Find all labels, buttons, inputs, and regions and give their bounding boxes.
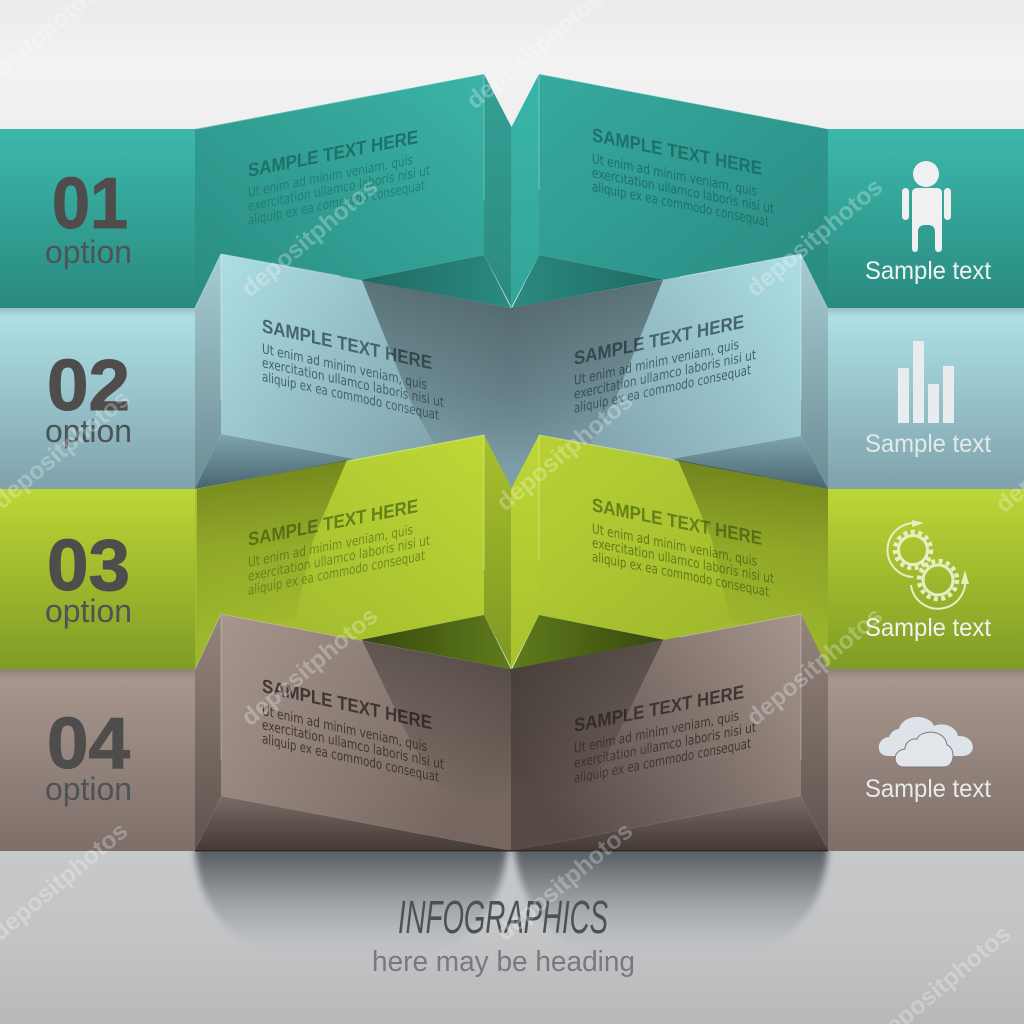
body text: Ut enim ad minim veniam, quis xyxy=(248,522,413,571)
panel 3 right face xyxy=(539,435,828,669)
option 02 label xyxy=(45,346,132,449)
band 3 right strip xyxy=(826,489,1024,669)
arc arrow 1 xyxy=(887,523,916,577)
body text: Ut enim ad minim veniam, quis xyxy=(248,152,413,201)
gear 1 teeth xyxy=(895,532,931,568)
panel 2 right text xyxy=(574,309,756,417)
torso and legs xyxy=(912,188,942,252)
panel 1 left text xyxy=(248,125,431,229)
number 01: 01 xyxy=(52,164,128,244)
body text: aliquip ex ea commodo consequat xyxy=(592,179,769,230)
head xyxy=(913,161,939,187)
band 3 left strip xyxy=(0,489,197,669)
panel 2 right underside xyxy=(665,436,828,489)
subtitle: here may be heading xyxy=(372,946,635,978)
body text: Ut enim ad minim veniam, quis xyxy=(592,521,757,570)
icon: bar chart xyxy=(898,341,954,423)
reflection left lobe xyxy=(195,846,508,963)
panel 3 right cast shadow xyxy=(678,460,828,640)
panel 3 left text xyxy=(248,494,431,599)
base line xyxy=(195,850,828,852)
panel 3 left cast shadow xyxy=(197,460,347,640)
panel 4 right side xyxy=(801,614,828,851)
number 03: 03 xyxy=(47,526,130,606)
caption 3: Sample text xyxy=(865,614,991,642)
band 1 right strip xyxy=(826,129,1024,308)
number 02: 02 xyxy=(47,346,130,426)
body text: aliquip ex ea commodo consequat xyxy=(574,362,751,417)
caption 4: Sample text xyxy=(865,775,991,803)
body text: Ut enim ad minim veniam, quis xyxy=(262,341,427,393)
band 4 left strip xyxy=(0,669,197,851)
icon: gears with arrows xyxy=(887,520,969,609)
source watermarks: depositphotos xyxy=(237,602,383,732)
panel 1 right face xyxy=(539,74,828,308)
band 1 xyxy=(0,129,1024,308)
body text: exercitation ullamco laboris nisi ut xyxy=(574,720,757,772)
panel 2 left cast shadow xyxy=(362,280,511,470)
panel 4 left cast shadow xyxy=(362,640,511,800)
panel 4 right underside xyxy=(511,796,828,851)
option text: option xyxy=(45,593,132,629)
arrowhead 2 xyxy=(961,570,969,584)
panel 3 left underside xyxy=(360,615,511,669)
heading: SAMPLE TEXT HERE xyxy=(592,125,762,180)
panel 4 right face xyxy=(511,614,801,851)
number 04: 04 xyxy=(47,704,130,784)
body text: Ut enim ad minim veniam, quis xyxy=(574,708,739,757)
panel 3: green fold xyxy=(195,435,828,669)
arc arrow 2 xyxy=(911,578,965,609)
panel 3 right text xyxy=(592,495,775,601)
gear 2 ring xyxy=(923,565,953,595)
option 04 label xyxy=(45,704,132,807)
panel 4 left text xyxy=(262,676,444,787)
body text: aliquip ex ea commodo consequat xyxy=(262,369,439,424)
panel 4 right cast shadow xyxy=(511,640,663,800)
panel 2 right side xyxy=(801,254,828,489)
reflection right lobe xyxy=(514,846,828,963)
panel 4 right text xyxy=(574,680,757,787)
panel 1 left underside xyxy=(360,255,511,308)
heading: SAMPLE TEXT HERE xyxy=(248,496,418,551)
title: INFOGRAPHICS xyxy=(398,891,608,943)
heading: SAMPLE TEXT HERE xyxy=(262,676,432,734)
heading: SAMPLE TEXT HERE xyxy=(248,127,418,182)
gear 1 ring xyxy=(898,536,928,564)
body text: aliquip ex ea commodo consequat xyxy=(574,736,751,787)
band 2 xyxy=(0,308,1024,489)
band 2 left strip xyxy=(0,308,197,489)
back cloud xyxy=(879,717,973,756)
panel 4 left face xyxy=(221,614,511,851)
panel 1: teal fold xyxy=(195,74,828,308)
panel 2 left text xyxy=(262,316,444,425)
body text: aliquip ex ea commodo consequat xyxy=(248,548,425,599)
floor reflection xyxy=(195,846,828,963)
arrowhead 1 xyxy=(912,520,924,527)
body text: exercitation ullamco laboris nisi ut xyxy=(574,347,756,403)
caption 1: Sample text xyxy=(865,257,991,285)
panel 2 left face xyxy=(221,254,511,489)
band 1 left strip xyxy=(0,129,197,308)
panel 1 left side xyxy=(484,74,512,308)
icon: person xyxy=(902,161,951,252)
panel 4 left side xyxy=(195,614,221,851)
page background top xyxy=(0,0,1024,130)
left arm xyxy=(902,188,909,220)
panel 1 right text xyxy=(592,125,775,231)
option text: option xyxy=(45,413,132,449)
panel 2 left side xyxy=(195,254,221,489)
panel 4 highlights xyxy=(195,614,801,760)
panel 3 left face xyxy=(195,435,484,669)
page background bottom xyxy=(0,851,1024,1024)
panel 3 right side xyxy=(511,435,539,669)
body text: aliquip ex ea commodo consequat xyxy=(248,178,425,229)
panel 1 highlights xyxy=(197,74,828,200)
panel 1 left face xyxy=(195,74,484,308)
heading: SAMPLE TEXT HERE xyxy=(592,495,762,550)
body text: exercitation ullamco laboris nisi ut xyxy=(248,533,431,585)
body text: aliquip ex ea commodo consequat xyxy=(262,731,439,786)
body text: aliquip ex ea commodo consequat xyxy=(592,549,769,600)
option text: option xyxy=(45,234,132,270)
source watermarks: depositphotos xyxy=(742,173,888,303)
heading: SAMPLE TEXT HERE xyxy=(262,316,432,374)
panel 2 highlights xyxy=(195,254,801,400)
panel 2: light blue fold xyxy=(195,254,828,489)
icon: clouds xyxy=(879,717,973,767)
panel 4: brown fold xyxy=(195,614,828,852)
band 4 right strip xyxy=(826,669,1024,851)
heading: SAMPLE TEXT HERE xyxy=(574,682,744,737)
bar 2 xyxy=(913,341,924,423)
body text: Ut enim ad minim veniam, quis xyxy=(574,337,739,389)
body text: exercitation ullamco laboris nisi ut xyxy=(592,535,775,587)
body text: exercitation ullamco laboris nisi ut xyxy=(248,163,431,215)
front cloud xyxy=(895,732,953,767)
option 01 label xyxy=(45,164,132,270)
body text: exercitation ullamco laboris nisi ut xyxy=(262,355,444,411)
panel 2 left underside xyxy=(195,434,360,489)
bar 3 xyxy=(928,384,939,423)
panel 3 right underside xyxy=(512,615,665,669)
option text: option xyxy=(45,771,132,807)
band 4 xyxy=(0,669,1024,851)
panel 2 right cast shadow xyxy=(511,280,663,470)
body text: exercitation ullamco laboris nisi ut xyxy=(262,717,444,773)
heading: SAMPLE TEXT HERE xyxy=(574,312,744,370)
band 3 xyxy=(0,489,1024,669)
source watermarks: depositphotos xyxy=(237,173,383,303)
panel 2 right face xyxy=(511,254,801,489)
caption 2: Sample text xyxy=(865,430,991,458)
right arm xyxy=(944,188,951,220)
gear 2 teeth xyxy=(919,561,957,599)
body text: Ut enim ad minim veniam, quis xyxy=(592,151,757,200)
band 2 right strip xyxy=(826,308,1024,489)
panel 4 left underside xyxy=(195,796,511,851)
body text: Ut enim ad minim veniam, quis xyxy=(262,703,427,755)
source watermarks: depositphotos xyxy=(492,387,638,517)
body text: exercitation ullamco laboris nisi ut xyxy=(592,165,775,217)
source watermarks: depositphotos xyxy=(492,817,638,947)
panel 3 left side xyxy=(484,435,512,669)
panel 3 highlights xyxy=(350,435,675,570)
panel 1 right underside xyxy=(512,255,665,308)
panel 1 right side xyxy=(511,74,539,308)
option 03 label xyxy=(45,526,132,629)
bar 1 xyxy=(898,368,909,423)
source watermarks: depositphotos xyxy=(742,602,888,732)
bar 4 xyxy=(943,366,954,423)
